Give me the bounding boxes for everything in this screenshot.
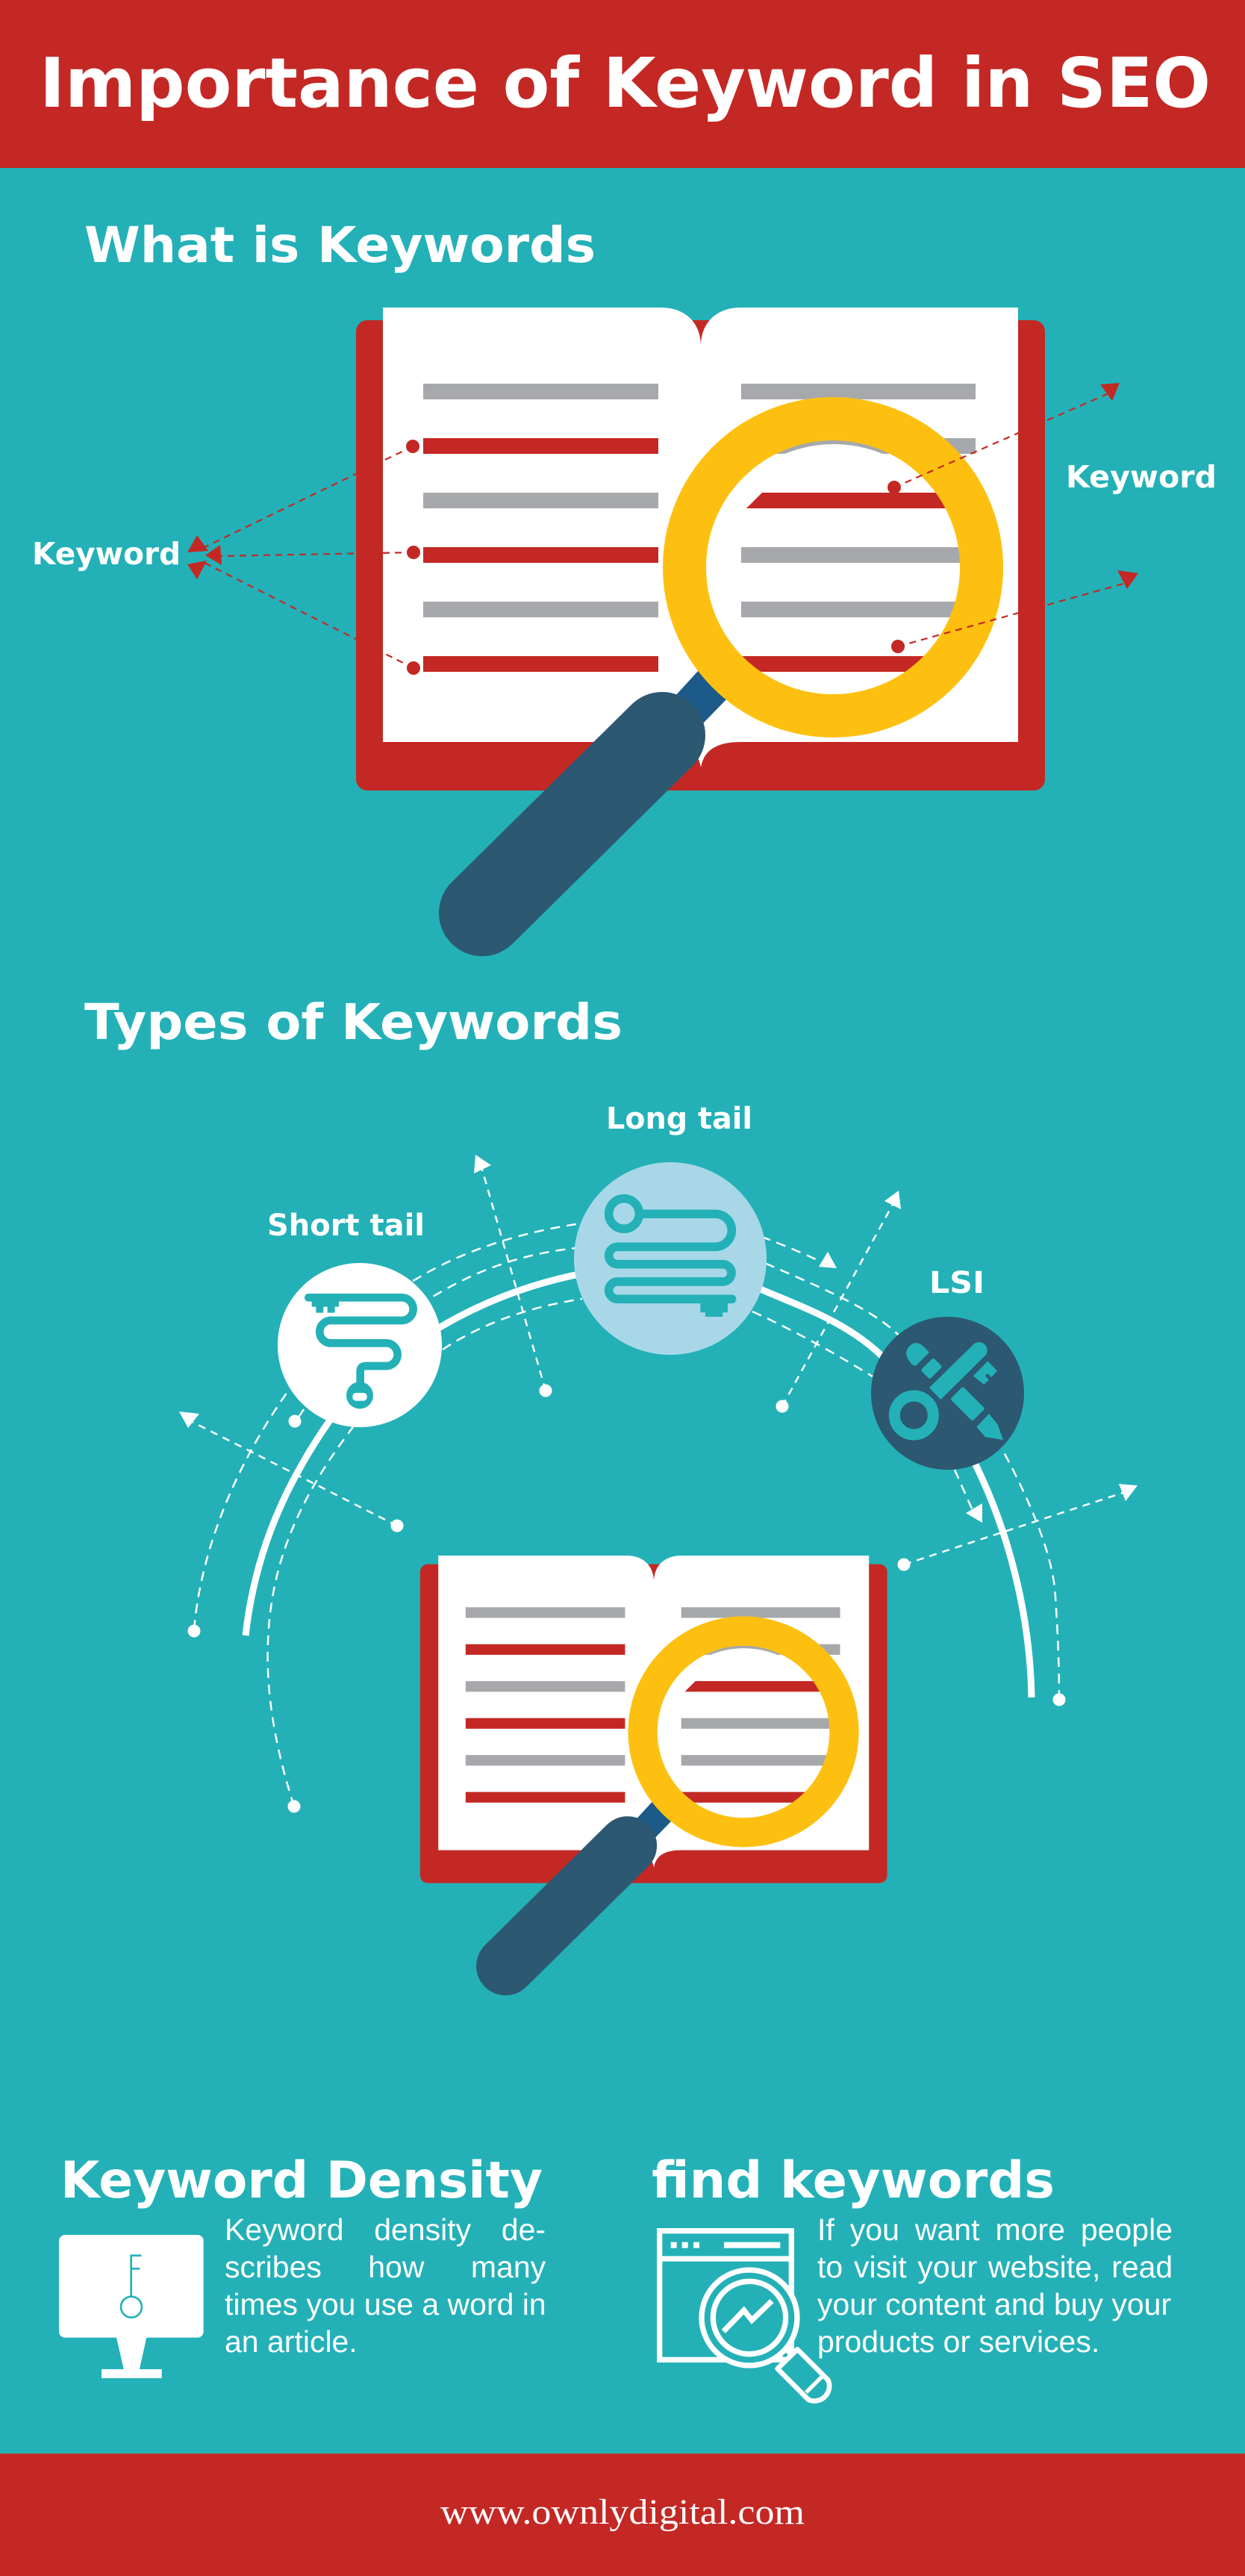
- label: long tail: Long tail: [606, 1102, 752, 1136]
- text: find keywords description: [817, 2212, 1173, 2359]
- book cover: [356, 320, 1045, 790]
- circle: short tail key: [278, 1263, 442, 1427]
- circle: LSI: [871, 1317, 1024, 1470]
- label: short tail: Short tail: [267, 1209, 425, 1243]
- magnifier neck: [636, 1802, 672, 1838]
- text: find keywords description: your content and buy your: [817, 2287, 1171, 2321]
- text: keyword density description: Keyword density de-: [225, 2212, 546, 2247]
- text: keyword density description: times you use a word in: [225, 2287, 546, 2321]
- text: keyword density description: [225, 2212, 546, 2359]
- magnified lens content: [741, 444, 960, 672]
- label: LSI: LSI: [929, 1266, 985, 1300]
- book pages: [383, 308, 1018, 767]
- icon: browser with magnifier: [660, 2231, 829, 2401]
- icon: crossed key and pencil: [894, 1342, 1003, 1440]
- heading: what is keywords: What is Keywords: [84, 216, 596, 274]
- dots: [188, 1384, 1066, 1812]
- icon: long key: [609, 1199, 732, 1317]
- heading: types of keywords: Types of Keywords: [84, 994, 622, 1051]
- book pages: [438, 1556, 869, 1868]
- arrow lines: [188, 1164, 1127, 1565]
- left page text lines: [423, 384, 658, 672]
- website url: www.ownlydigital.com: [440, 2492, 805, 2532]
- title: Importance of Keyword in SEO: [40, 43, 1211, 123]
- right page text lines: [681, 1607, 840, 1655]
- book cover: [420, 1565, 887, 1883]
- text: keyword density description: an article.: [225, 2324, 358, 2359]
- left page text lines: [466, 1607, 625, 1803]
- heading: find keywords: find keywords: [652, 2151, 1055, 2210]
- header banner: [0, 0, 1245, 168]
- text: keyword density description: scribes how many: [225, 2250, 546, 2284]
- right keyword pointers: [887, 383, 1138, 653]
- label: keyword left: Keyword: [32, 536, 181, 572]
- illustration: open book with magnifier: [187, 308, 1138, 913]
- right page text lines: [741, 384, 976, 454]
- text: find keywords description: to visit your website, read: [817, 2250, 1173, 2284]
- left keyword pointers: [187, 440, 420, 675]
- magnifier ring: [684, 419, 982, 716]
- dashed arcs: [194, 1217, 1059, 1806]
- icon: monitor with key: [59, 2235, 204, 2378]
- icon: short key: [308, 1297, 414, 1409]
- illustration: small book with magnifier: [420, 1556, 887, 1966]
- diagram: keyword types arc: [179, 1155, 1138, 1812]
- label: keyword right: Keyword: [1066, 459, 1217, 495]
- magnified lens content: [681, 1648, 830, 1803]
- circle: long tail key: [574, 1162, 767, 1355]
- footer banner: [0, 2454, 1245, 2576]
- main white arc: [246, 1267, 1032, 1697]
- magnifier neck: [675, 670, 728, 724]
- text: find keywords description: products or services.: [817, 2324, 1099, 2359]
- heading: keyword density: Keyword Density: [60, 2151, 543, 2210]
- magnifier ring: [643, 1631, 844, 1833]
- arrow heads: [179, 1155, 1138, 1523]
- magnifier handle: [482, 735, 662, 913]
- magnifier handle: [505, 1846, 628, 1966]
- text: find keywords description: If you want more people: [817, 2212, 1173, 2247]
